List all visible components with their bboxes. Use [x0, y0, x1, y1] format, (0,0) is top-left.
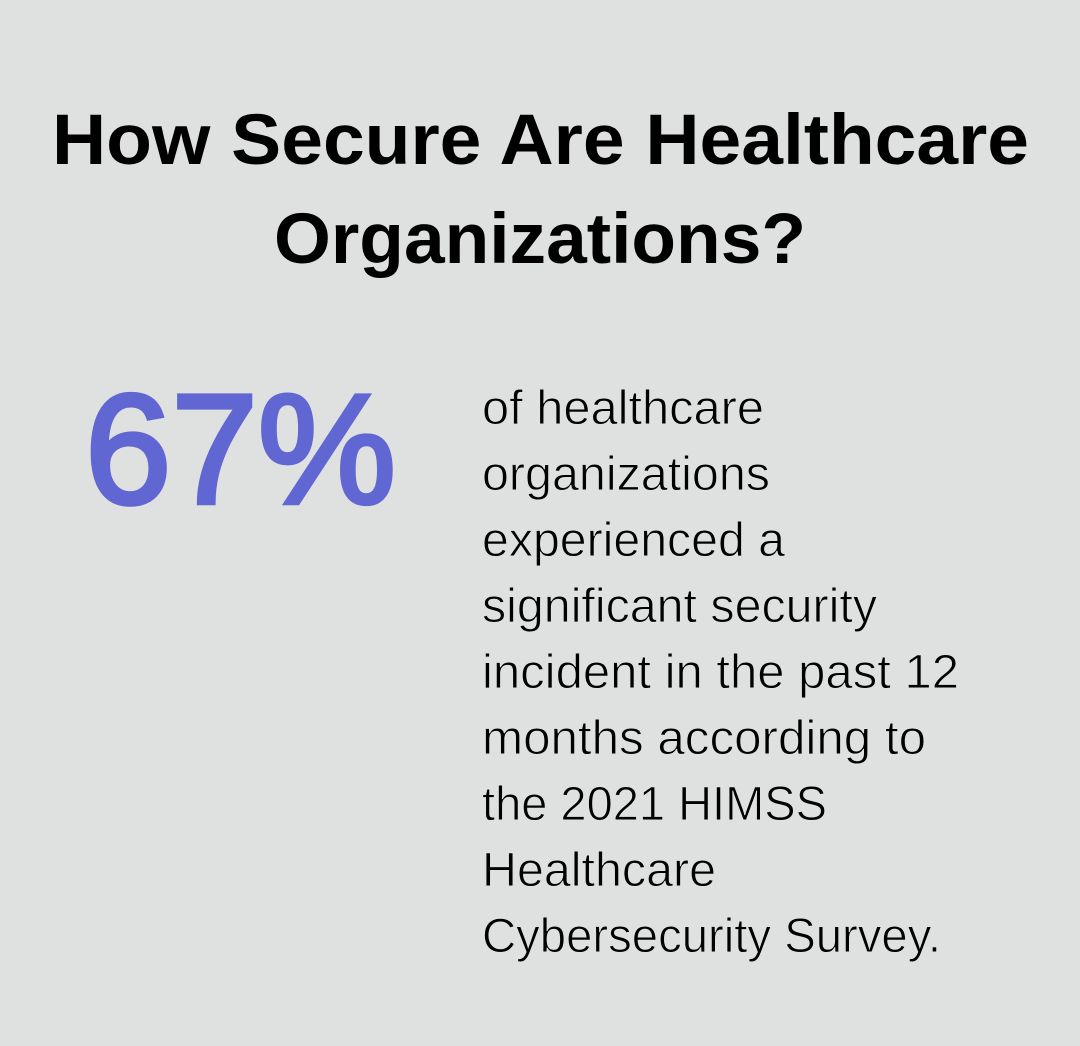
description text block: the 2021 HIMSS [482, 778, 827, 831]
title [52, 101, 1029, 279]
description text block: Healthcare [482, 844, 716, 897]
big statistic: 67%: 67% [85, 363, 396, 537]
description text block [482, 382, 959, 963]
title: Organizations? [274, 200, 806, 279]
description text block: Cybersecurity Survey. [482, 910, 941, 963]
description text block: experienced a [482, 514, 785, 567]
description text block: months according to [482, 712, 926, 765]
description text block: organizations [482, 448, 770, 501]
title: How Secure Are Healthcare [52, 101, 1029, 180]
description text block: significant security [482, 580, 877, 633]
description text block: of healthcare [482, 382, 764, 435]
description text block: incident in the past 12 [482, 646, 959, 699]
